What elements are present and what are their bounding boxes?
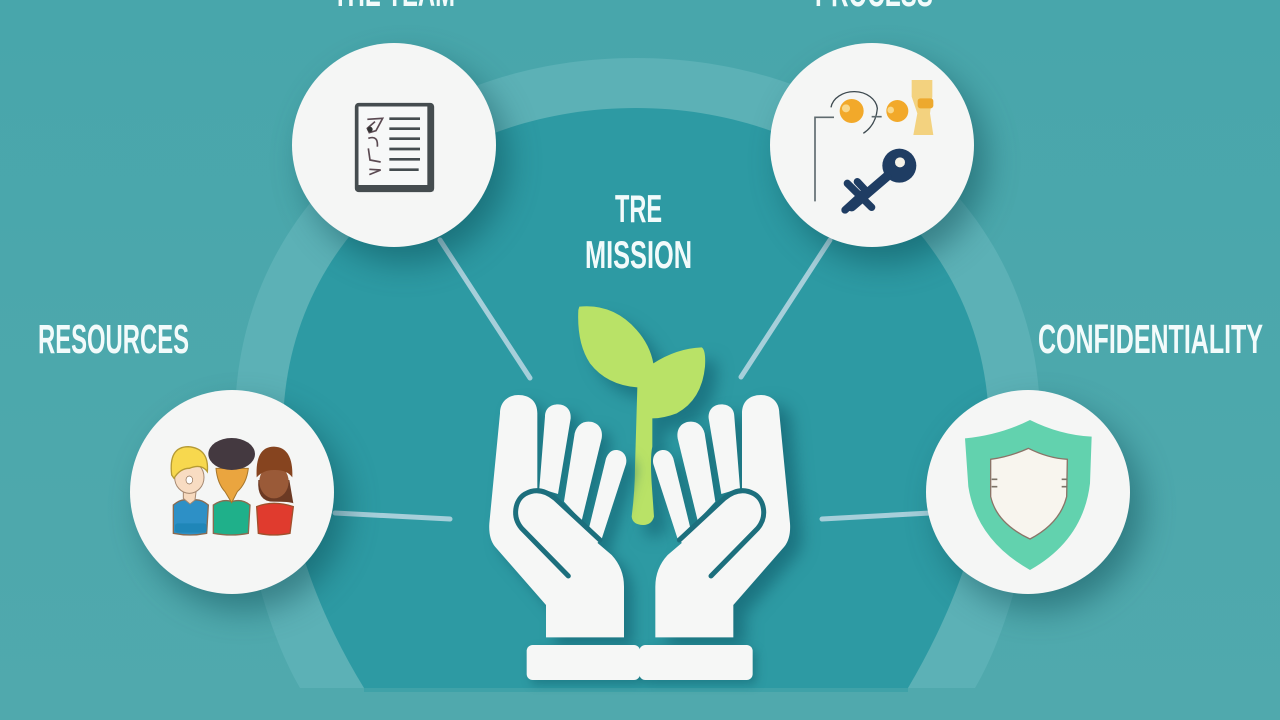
node: confidentiality: [926, 390, 1130, 594]
icon: shield: [965, 420, 1092, 570]
node: the team: [292, 43, 496, 247]
icon: checklist: [357, 105, 433, 191]
icon: three people: [171, 438, 293, 535]
outer arch ring: [235, 58, 1040, 688]
circle: [926, 390, 1130, 594]
left hand: [489, 395, 626, 637]
title: the mission: [585, 188, 692, 277]
circle: [770, 43, 974, 247]
person: green: [208, 438, 255, 535]
right hand: [653, 395, 790, 637]
arch base strip: [364, 688, 908, 692]
node: resources: [130, 390, 334, 594]
base bar: [527, 645, 753, 680]
person: red: [257, 447, 293, 535]
title: the mission: TRE: [615, 188, 662, 231]
label: resources: RESOURCES: [38, 316, 189, 362]
inner arch panel: [283, 108, 989, 688]
node: process: [770, 43, 974, 247]
central illustration: hands and sprout: [489, 306, 790, 680]
circle: [292, 43, 496, 247]
sprout: [578, 306, 705, 525]
person: blue: [171, 447, 208, 535]
connector lines: [335, 240, 930, 519]
icon: gears and key: [815, 80, 933, 210]
circle: [130, 390, 334, 594]
title: the mission: MISSION: [585, 234, 692, 277]
